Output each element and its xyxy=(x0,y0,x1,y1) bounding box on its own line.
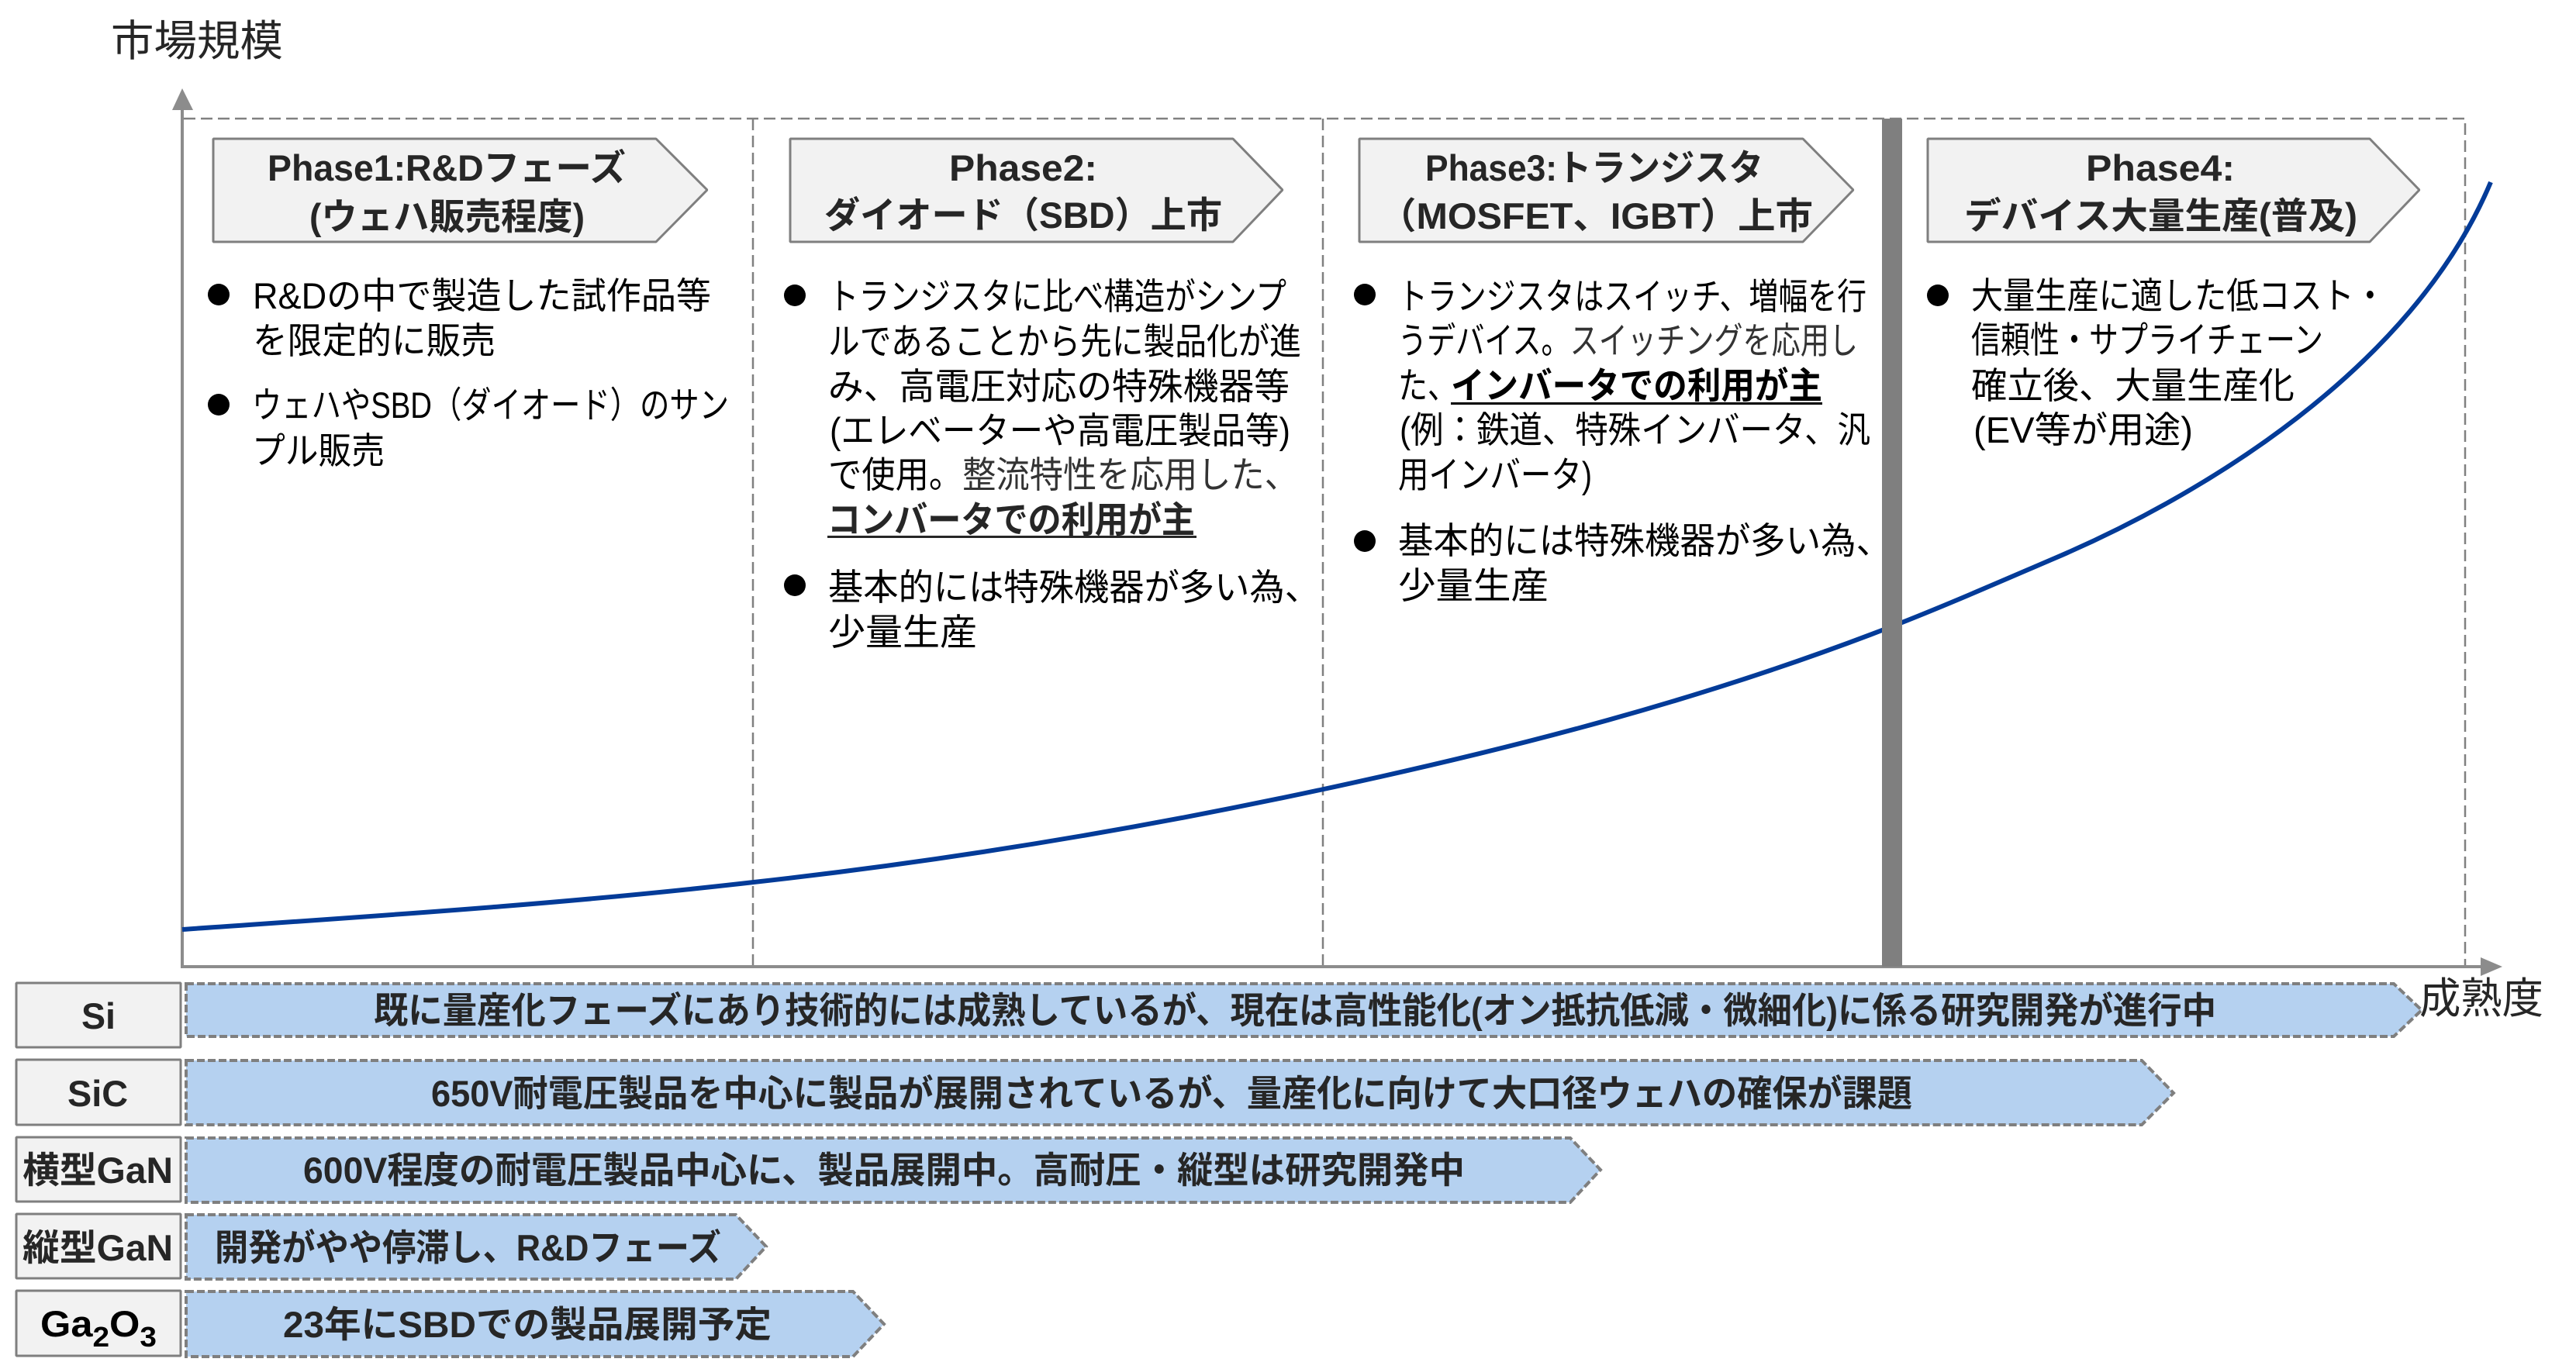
growth curve xyxy=(182,182,2491,929)
phase 1 heading xyxy=(213,139,707,242)
phase divider bar xyxy=(1882,119,1902,967)
label: Ga2O3: Ga xyxy=(40,1303,89,1344)
panel: phase 3 xyxy=(1354,139,1891,606)
bar: lateral GaN: 600V程度の耐電圧製品中心に、製品展開中。高耐圧・縦型は研究開発中 xyxy=(303,1150,1465,1191)
phase 4 bullets: 大量生産に適した低コスト・ xyxy=(1971,275,2386,316)
phase 2 bullets: 少量生産 xyxy=(828,612,977,653)
phase 2 bullets: トランジスタに比べ構造がシンプ xyxy=(828,276,1286,317)
phase 2 heading: ダイオード（SBD）上市 xyxy=(824,195,1222,236)
phase 2 bullets: で使用。整流特性を応用した、 xyxy=(828,454,1298,495)
label: Ga2O3: O xyxy=(109,1303,140,1344)
phase frame with dividers xyxy=(184,119,2465,966)
phase 3 heading: Phase3:トランジスタ xyxy=(1425,147,1763,188)
phase 2 heading xyxy=(790,139,1283,242)
phase 2 bullets: コンバータでの利用が主 xyxy=(827,499,1195,540)
label: Ga2O3: 2 xyxy=(93,1321,109,1353)
bar: SiC: 650V耐電圧製品を中心に製品が展開されているが、量産化に向けて大口径ウェハの確保が課題 xyxy=(431,1073,1912,1114)
phase 4 bullets: 信頼性・サプライチェーン xyxy=(1971,319,2323,360)
bar: vertical GaN xyxy=(186,1215,766,1279)
phase 3 heading xyxy=(1359,139,1853,242)
phase 3 bullets: 少量生産 xyxy=(1398,565,1549,606)
bar: SiC xyxy=(186,1060,2174,1125)
phase 4 heading: Phase4: xyxy=(2086,147,2235,188)
phase 2 bullets: (エレベーターや高電圧製品等) xyxy=(830,410,1290,451)
bar: Si: 既に量産化フェーズにあり技術的には成熟しているが、現在は高性能化(オン抵抗低減・微細化)に係る研究開発が進行中 xyxy=(374,990,2216,1031)
phase 2 bullets: み、高電圧対応の特殊機器等 xyxy=(828,366,1290,407)
phase 3 bullets xyxy=(1354,276,1891,606)
bar: lateral GaN xyxy=(186,1138,1601,1202)
phase 1 heading: Phase1:R&Dフェーズ xyxy=(268,147,626,188)
phase 3 bullets: トランジスタはスイッチ、増幅を行 xyxy=(1398,276,1866,317)
label: vertical GaN xyxy=(16,1214,181,1278)
phase 2 bullets xyxy=(784,276,1320,653)
row: Si xyxy=(16,983,2422,1047)
phase 4 bullets: 確立後、大量生産化 xyxy=(1971,365,2295,406)
bar: Ga2O3 xyxy=(186,1291,884,1357)
row: Ga2O3 xyxy=(16,1291,884,1357)
label: Ga2O3 xyxy=(16,1291,181,1356)
row: vertical GaN xyxy=(16,1214,766,1279)
x axis arrow xyxy=(181,957,2502,976)
label: SiC: SiC xyxy=(67,1073,128,1114)
bar: Ga2O3: 23年にSBDでの製品展開予定 xyxy=(283,1304,772,1345)
phase 1 bullets: を限定的に販売 xyxy=(253,320,496,361)
y-axis label: 市場規模 xyxy=(111,17,283,65)
phase 2 heading: Phase2: xyxy=(949,147,1097,188)
phase 3 bullets: 基本的には特殊機器が多い為、 xyxy=(1398,520,1891,561)
phase 2 bullets: ルであることから先に製品化が進 xyxy=(828,321,1301,362)
phase 3 bullets: (例：鉄道、特殊インバータ、汎 xyxy=(1400,409,1870,450)
phase 3 heading: （MOSFET、IGBT）上市 xyxy=(1379,195,1813,236)
phase 3 bullets: うデバイス。スイッチングを応用し xyxy=(1398,320,1858,361)
phase 4 bullets: (EV等が用途) xyxy=(1973,409,2193,450)
panel: phase 4 xyxy=(1927,139,2419,450)
phase 1 bullets: プル販売 xyxy=(252,430,385,471)
row: SiC xyxy=(16,1060,2174,1125)
label: lateral GaN: 横型GaN xyxy=(22,1150,173,1191)
phase 3 bullets: 用インバータ) xyxy=(1398,454,1592,495)
panel: phase 2 xyxy=(784,139,1320,653)
phase 2 bullets: 基本的には特殊機器が多い為、 xyxy=(828,567,1320,608)
phase 4 heading xyxy=(1928,139,2419,242)
phase 3 bullets: インバータでの利用が主 xyxy=(1451,365,1822,406)
phase 1 bullets: R&Dの中で製造した試作品等 xyxy=(253,275,711,316)
x-axis label: 成熟度 xyxy=(2419,974,2543,1022)
phase 1 heading: (ウェハ販売程度) xyxy=(309,196,585,237)
phase 4 bullets xyxy=(1927,275,2386,450)
y axis arrow xyxy=(172,88,193,967)
bar: vertical GaN: 開発がやや停滞し、R&Dフェーズ xyxy=(215,1227,721,1268)
phase 3 bullets: た、 xyxy=(1398,365,1457,406)
label: lateral GaN xyxy=(16,1137,181,1202)
axes xyxy=(172,88,2502,976)
bar: Si xyxy=(186,984,2422,1036)
phase 1 bullets xyxy=(208,275,729,471)
label: vertical GaN: 縦型GaN xyxy=(22,1227,173,1268)
label: Si: Si xyxy=(81,995,116,1036)
row: lateral GaN xyxy=(16,1137,1601,1202)
phase 4 heading: デバイス大量生産(普及) xyxy=(1964,195,2357,236)
panel: phase 1 xyxy=(208,139,729,471)
label: Si xyxy=(16,983,181,1047)
label: Ga2O3: 3 xyxy=(140,1321,157,1353)
label: SiC xyxy=(16,1060,181,1125)
phase 1 bullets: ウェハやSBD（ダイオード）のサン xyxy=(252,384,729,426)
